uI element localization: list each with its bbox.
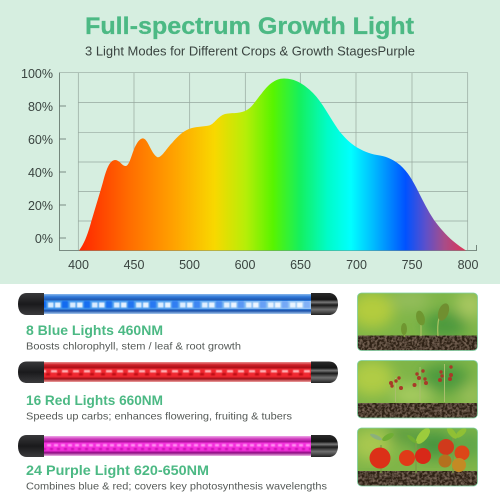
x axis labels: 600 bbox=[235, 258, 255, 272]
chart grid bbox=[59, 73, 468, 250]
blue light heading: 8 Blue Lights 460NM bbox=[26, 322, 163, 338]
purple light tube bbox=[18, 435, 338, 457]
bottom panel bbox=[0, 284, 500, 500]
background: top panel bbox=[0, 0, 500, 284]
spectrum curve bbox=[79, 78, 466, 250]
title: Full-spectrum Growth Light bbox=[85, 13, 414, 40]
photo borders bbox=[358, 293, 478, 486]
y axis labels: 0% bbox=[35, 232, 53, 246]
x axis labels: 700 bbox=[346, 258, 367, 272]
x axis labels: 750 bbox=[402, 258, 422, 272]
x axis labels: 650 bbox=[290, 258, 311, 272]
subtitle: 3 Light Modes for Different Crops & Growth StagesPurple bbox=[85, 44, 415, 58]
y axis labels bbox=[21, 67, 53, 246]
purple light heading: 24 Purple Light 620-650NM bbox=[26, 462, 209, 478]
y axis labels: 80% bbox=[28, 100, 53, 114]
x axis labels: 450 bbox=[124, 258, 144, 272]
photo: fruiting plants bbox=[358, 428, 478, 486]
y axis ticks and baseline bbox=[60, 73, 476, 250]
photo: flowering seedlings bbox=[358, 360, 478, 418]
x axis labels: 500 bbox=[179, 258, 200, 272]
y axis labels: 20% bbox=[28, 199, 53, 213]
photo: sprouts bbox=[358, 293, 478, 350]
y axis labels: 100% bbox=[21, 67, 53, 81]
purple light description: Combines blue & red; covers key photosynthesis wavelengths bbox=[26, 480, 327, 492]
x axis labels: 400 bbox=[68, 258, 89, 272]
blue light tube bbox=[18, 293, 338, 315]
x axis labels bbox=[68, 258, 478, 272]
y axis labels: 40% bbox=[28, 166, 53, 180]
red light tube bbox=[18, 362, 338, 383]
red light description: Speeds up carbs; enhances flowering, fruiting & tubers bbox=[26, 410, 292, 422]
x axis labels: 800 bbox=[458, 258, 478, 272]
blue light description: Boosts chlorophyll, stem / leaf & root growth bbox=[26, 340, 241, 352]
red light heading: 16 Red Lights 660NM bbox=[26, 392, 163, 408]
spectrum chart bbox=[21, 67, 478, 272]
y axis labels: 60% bbox=[28, 133, 53, 147]
